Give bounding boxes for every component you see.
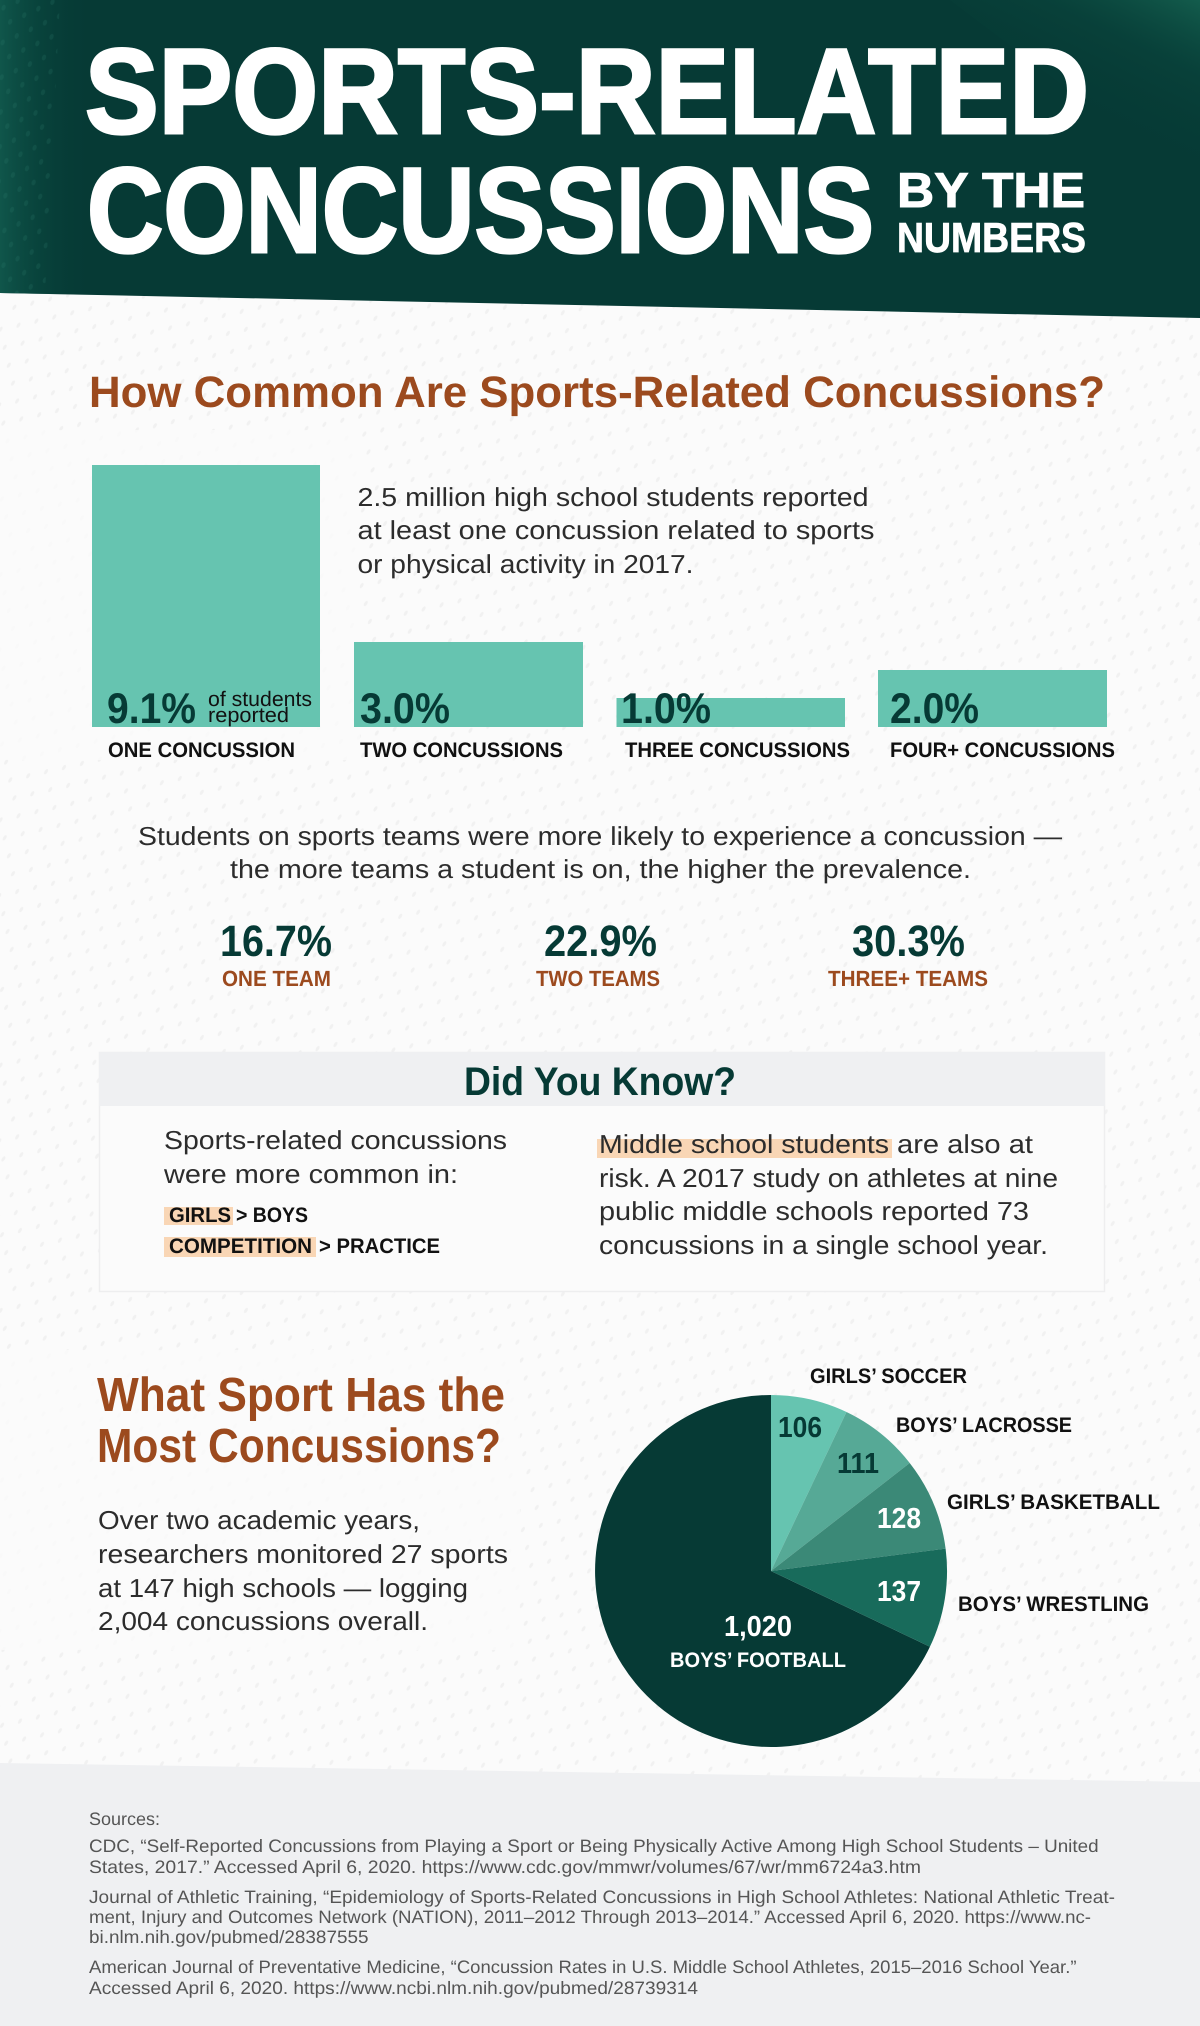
source: journal of athletic training: Journal of Athletic Training, “Epidemiology of Sports-Related Concussions in High School Athletes: National Athletic Treat- <box>89 1887 1115 1907</box>
slice: boys wrestling <box>771 1549 947 1647</box>
stat: three plus teams <box>828 917 988 991</box>
bar: four plus concussions: FOUR+ CONCUSSIONS <box>890 739 1115 762</box>
text block: monitoring <box>98 1505 508 1636</box>
left column: were more common in: <box>163 1159 458 1189</box>
text block: sports teams: Students on sports teams were more likely to experience a concussion — <box>138 821 1062 851</box>
source: american journal: Accessed April 6, 2020. https://www.ncbi.nlm.nih.gov/pubmed/28739314 <box>89 1978 698 1998</box>
slice labels: BOYS’ LACROSSE <box>896 1414 1072 1437</box>
slice: boys lacrosse <box>771 1412 910 1571</box>
stat: one team: 16.7% <box>220 917 332 966</box>
right column: Middle school students <box>599 1129 889 1159</box>
bar: two concussions <box>354 642 583 762</box>
panel: did you know <box>99 1052 1105 1292</box>
right column: public middle schools reported 73 <box>599 1196 1029 1226</box>
subtitle by the: BY THE <box>897 164 1085 218</box>
bar: one concussion: 9.1% <box>107 685 196 733</box>
values: BOYS’ FOOTBALL <box>670 1649 846 1672</box>
stat: one team: ONE TEAM <box>222 966 331 991</box>
source: CDC: States, 2017.” Accessed April 6, 2020. https://www.cdc.gov/mmwr/volumes/67/wr/mm6724a3.htm <box>89 1857 921 1877</box>
pie chart <box>595 1365 1160 1747</box>
text block: 2.5 million: at least one concussion related to sports <box>358 515 874 545</box>
bar: one concussion: reported <box>208 704 289 727</box>
left column: COMPETITION <box>169 1235 312 1258</box>
title <box>85 23 1089 278</box>
source: american journal: American Journal of Preventative Medicine, “Concussion Rates in U.S. Middle School Athletes, 2015–2016 School Year.” <box>89 1957 1076 1977</box>
slice labels: GIRLS’ BASKETBALL <box>947 1491 1160 1514</box>
bar: one concussion <box>92 465 320 762</box>
stat: two teams: 22.9% <box>544 917 657 966</box>
stat: three plus teams: THREE+ TEAMS <box>828 966 988 991</box>
bar: four plus concussions <box>878 670 1115 762</box>
values: 1,020 <box>724 1611 792 1643</box>
bar: two concussions: 3.0% <box>360 685 450 733</box>
right column <box>597 1129 1058 1260</box>
slice labels: BOYS’ WRESTLING <box>958 1593 1149 1616</box>
left column: > BOYS <box>236 1204 308 1227</box>
text block: monitoring: at 147 high schools — logging <box>98 1573 468 1603</box>
source: journal of athletic training: bi.nlm.nih.gov/pubmed/28387555 <box>89 1927 368 1947</box>
slice: girls basketball <box>771 1463 946 1571</box>
heading: what sport: Most Concussions? <box>97 1420 501 1473</box>
text block: sports teams <box>138 821 1062 884</box>
slice labels <box>810 1365 1160 1616</box>
text block: 2.5 million: or physical activity in 2017. <box>358 549 694 579</box>
bar: four plus concussions: 2.0% <box>890 685 979 733</box>
bar: one concussion: ONE CONCUSSION <box>108 739 295 762</box>
bar: two concussions: TWO CONCUSSIONS <box>360 739 563 762</box>
stat: two teams <box>536 917 660 991</box>
right column: concussions in a single school year. <box>599 1230 1048 1260</box>
text block: sports teams: the more teams a student is on, the higher the prevalence. <box>230 854 971 884</box>
stat: one team <box>220 917 332 991</box>
title line 1: SPORTS-RELATED <box>85 23 1089 159</box>
title line 2: CONCUSSIONS <box>87 142 874 278</box>
left column: GIRLS <box>169 1204 231 1227</box>
text block: monitoring: 2,004 concussions overall. <box>98 1606 428 1636</box>
stats: teams <box>220 917 988 991</box>
header banner <box>0 0 1200 318</box>
bar: three concussions <box>616 685 850 762</box>
left column: > PRACTICE <box>319 1235 440 1258</box>
heading: what sport <box>97 1369 505 1473</box>
heading: what sport: What Sport Has the <box>97 1369 505 1422</box>
values: 128 <box>877 1503 921 1535</box>
values: 137 <box>877 1576 921 1608</box>
text block: monitoring: Over two academic years, <box>98 1505 420 1535</box>
slice: boys football <box>595 1395 930 1747</box>
sources heading: Sources: <box>89 1809 160 1829</box>
stat: two teams: TWO TEAMS <box>536 966 660 991</box>
right column: risk. A 2017 study on athletes at nine <box>599 1163 1058 1193</box>
slice: girls soccer <box>771 1395 846 1571</box>
panel: concussion bars <box>92 465 1115 762</box>
text block: 2.5 million: 2.5 million high school students reported <box>358 482 868 512</box>
heading: how common: How Common Are Sports-Related Concussions? <box>89 368 1105 417</box>
values <box>670 1412 921 1672</box>
bar: three concussions: 1.0% <box>621 685 711 733</box>
text block: 2.5 million <box>358 482 874 579</box>
source: CDC: CDC, “Self-Reported Concussions from Playing a Sport or Being Physically Active Among High School Students – United <box>89 1836 1099 1856</box>
source: journal of athletic training <box>89 1887 1115 1947</box>
right column: are also at <box>897 1129 1034 1159</box>
slice labels: GIRLS’ SOCCER <box>810 1365 967 1388</box>
heading: did you know: Did You Know? <box>464 1060 736 1104</box>
source: american journal <box>89 1957 1076 1998</box>
values: 106 <box>778 1412 822 1444</box>
stat: three plus teams: 30.3% <box>852 917 965 966</box>
values: 111 <box>837 1448 879 1480</box>
panel: sources <box>0 1763 1200 2026</box>
source: journal of athletic training: ment, Injury and Outcomes Network (NATION), 2011–2012 Through 2013–2014.” Accessed April 6, 2020. https://www.nc- <box>89 1907 1091 1927</box>
left column <box>163 1125 507 1258</box>
bar: three concussions: THREE CONCUSSIONS <box>625 739 850 762</box>
text block: monitoring: researchers monitored 27 sports <box>98 1539 508 1569</box>
source: CDC <box>89 1836 1099 1877</box>
bar: one concussion: of students <box>208 688 312 711</box>
subtitle numbers: NUMBERS <box>897 214 1086 261</box>
left column: Sports-related concussions <box>164 1125 507 1155</box>
